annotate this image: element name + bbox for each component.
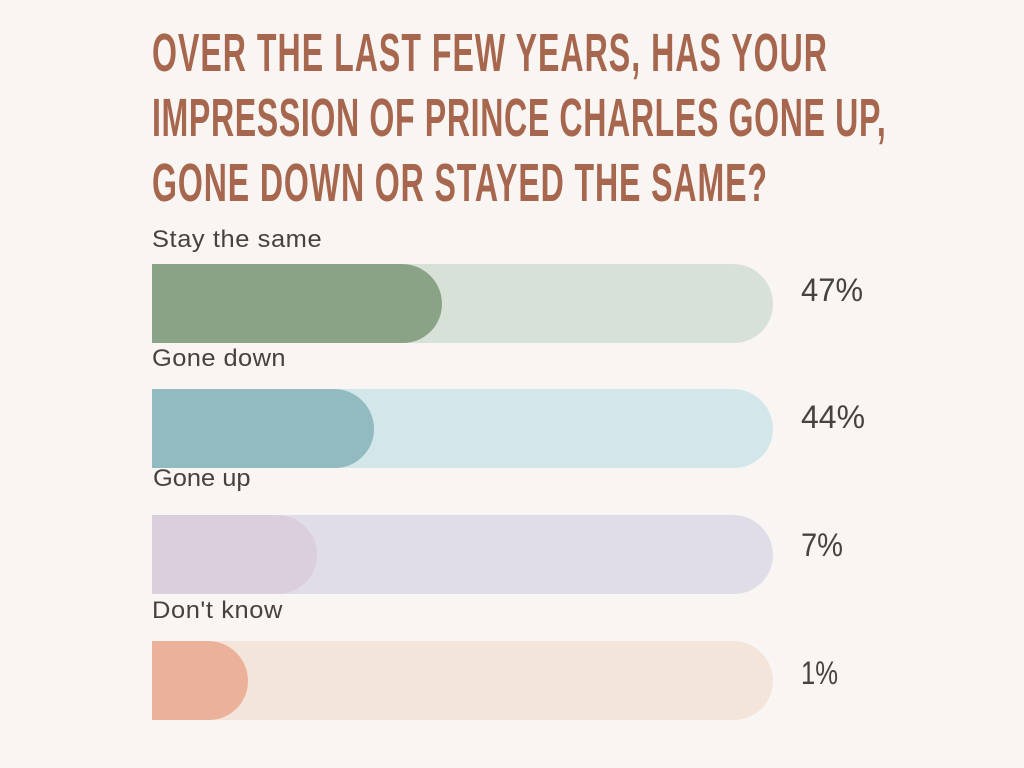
value: 47%: 47% bbox=[801, 272, 863, 308]
bar track: stay the same bbox=[152, 264, 773, 343]
bar track: don't know bbox=[152, 641, 773, 720]
label: gone down: Gone down bbox=[152, 346, 286, 372]
title bbox=[152, 24, 886, 213]
label: gone up: Gone up bbox=[153, 466, 251, 492]
bar fill: stay the same bbox=[152, 264, 442, 343]
bar fill: gone down bbox=[152, 389, 374, 468]
row: stay the same bbox=[152, 227, 863, 343]
bar fill: gone up bbox=[152, 515, 317, 594]
label: don't know: Don't know bbox=[152, 598, 283, 624]
bar track: gone down bbox=[152, 389, 773, 468]
value: 44%: 44% bbox=[801, 399, 865, 435]
label: stay the same: Stay the same bbox=[152, 227, 322, 253]
bar track: gone up bbox=[152, 515, 773, 594]
row: don't know bbox=[152, 598, 838, 720]
title: OVER THE LAST FEW YEARS, HAS YOUR bbox=[152, 24, 827, 83]
row: gone down bbox=[152, 346, 865, 468]
title: IMPRESSION OF PRINCE CHARLES GONE UP, bbox=[152, 89, 886, 148]
row: gone up bbox=[152, 466, 843, 594]
value: 1%: 1% bbox=[801, 655, 838, 691]
value: 7%: 7% bbox=[801, 527, 843, 563]
title: GONE DOWN OR STAYED THE SAME? bbox=[152, 154, 767, 213]
bar fill: don't know bbox=[152, 641, 248, 720]
